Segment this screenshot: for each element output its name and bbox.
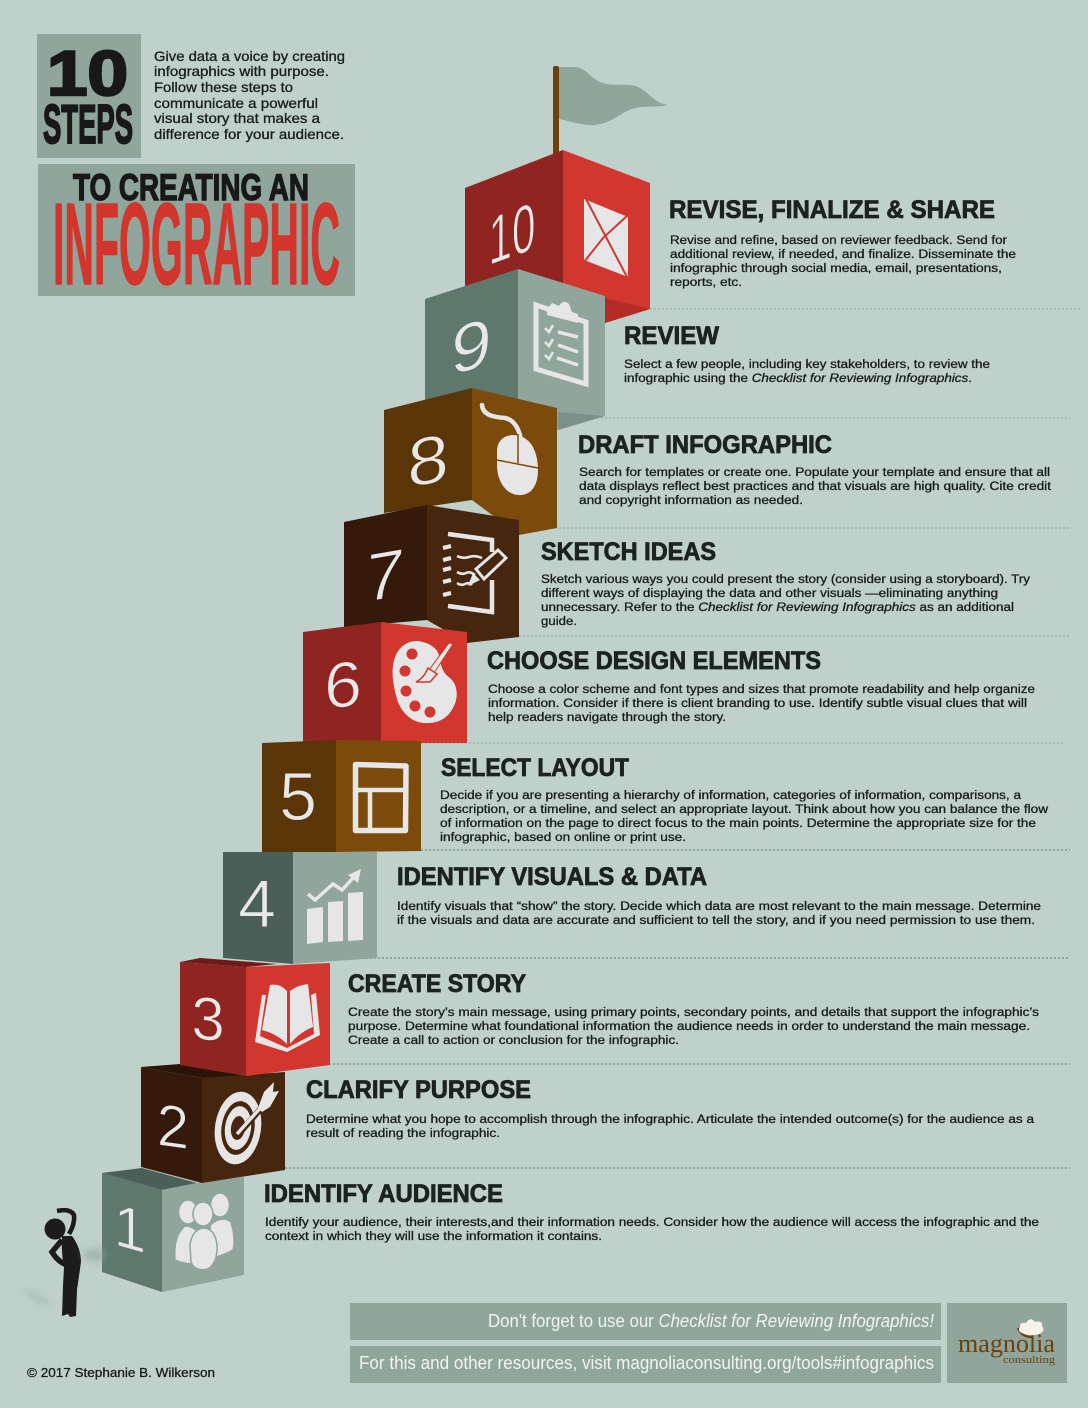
step 10 text: infographic through social media, email, presentations, bbox=[670, 261, 1002, 275]
intro text bbox=[154, 48, 345, 142]
step 5 text: Decide if you are presenting a hierarchy of information, categories of information, comparisons, a bbox=[440, 788, 1021, 802]
step 8 text: and copyright information as needed. bbox=[579, 493, 803, 507]
divider lines bbox=[285, 309, 1080, 1168]
step 3 text: purpose. Determine what foundational information the audience needs in order to understand the main message. bbox=[348, 1019, 1030, 1033]
step 8 text: Search for templates or create one. Populate your template and ensure that all bbox=[579, 465, 1050, 479]
cube 7 bbox=[344, 505, 519, 643]
cube 2 bbox=[141, 1064, 285, 1183]
step 10 text: REVISE, FINALIZE & SHARE bbox=[669, 197, 995, 224]
step 3 text: Create a call to action or conclusion for the infographic. bbox=[348, 1033, 679, 1047]
title block: to creating an infographic: TO CREATING AN bbox=[73, 167, 309, 208]
step 2 text: result of reading the infographic. bbox=[306, 1126, 500, 1140]
title block: to creating an infographic bbox=[38, 164, 355, 309]
intro text: difference for your audience. bbox=[154, 126, 344, 142]
text: INFOGRAPHIC bbox=[53, 179, 340, 309]
cube 5 bbox=[262, 740, 421, 852]
step 1 text: IDENTIFY AUDIENCE bbox=[264, 1181, 503, 1208]
step 7 text: unnecessary. Refer to the Checklist for Reviewing Infographics as an additional bbox=[541, 600, 1014, 614]
step 4 text: Identify visuals that “show” the story. Decide which data are most relevant to the main message. Determine bbox=[397, 899, 1041, 913]
step 3 text: CREATE STORY bbox=[348, 971, 526, 998]
title block: 10 steps: STEPS bbox=[43, 93, 133, 155]
step 8 text: DRAFT INFOGRAPHIC bbox=[578, 432, 832, 459]
cube 8 bbox=[384, 388, 557, 535]
step 7 text: SKETCH IDEAS bbox=[541, 539, 716, 566]
step 5 text bbox=[440, 755, 1048, 844]
step 7 text: Sketch various ways you could present the story (consider using a storyboard). Try bbox=[541, 572, 1031, 586]
step 9 text: infographic using the Checklist for Reviewing Infographics . bbox=[624, 371, 972, 385]
step 3 text: Create the story’s main message, using primary points, secondary points, and details that support the infographic’s bbox=[348, 1005, 1039, 1019]
cube 8: 8 bbox=[407, 420, 449, 503]
footer banner: checklist reminder: Don't forget to use our Checklist for Reviewing Infographics! bbox=[488, 1311, 934, 1331]
step 2 text: Determine what you hope to accomplish through the infographic. Articulate the intended outcome(s) for the audience as a bbox=[306, 1112, 1034, 1126]
flag bbox=[553, 66, 668, 156]
step 7 text: different ways of displaying the data and other visuals —eliminating anything bbox=[541, 586, 998, 600]
cube 10: 10 bbox=[489, 188, 535, 281]
step 10 text: Revise and refine, based on reviewer feedback. Send for bbox=[670, 233, 1007, 247]
footer banner: resources link bbox=[350, 1346, 941, 1383]
step 10 text bbox=[669, 197, 1016, 289]
intro text: Follow these steps to bbox=[154, 79, 293, 95]
icon: target with arrow bbox=[210, 1082, 279, 1167]
step 7 text: guide. bbox=[541, 614, 577, 628]
cube 10 bbox=[465, 150, 650, 345]
cube 7: 7 bbox=[363, 534, 406, 617]
cube 3 bbox=[180, 958, 330, 1076]
cube 9 bbox=[425, 269, 605, 430]
logo: magnolia consulting: consulting bbox=[1003, 1355, 1056, 1366]
icon: rising bar chart bbox=[307, 869, 363, 944]
logo: magnolia consulting: magnolia bbox=[958, 1329, 1055, 1358]
step 2 text: CLARIFY PURPOSE bbox=[306, 1077, 531, 1104]
icon: paint palette bbox=[393, 641, 457, 723]
step 7 text bbox=[541, 539, 1031, 628]
cube 6 bbox=[303, 622, 467, 743]
intro text: communicate a powerful bbox=[154, 95, 318, 111]
step 4 text: if the visuals and data are accurate and sufficient to tell the story, and if you need permission to use them. bbox=[397, 913, 1035, 927]
step 5 text: description, or a timeline, and select an appropriate layout. Think about how you can balance the flow bbox=[440, 802, 1048, 816]
intro text: infographics with purpose. bbox=[154, 63, 329, 79]
icon: open book bbox=[255, 984, 320, 1052]
intro text: Give data a voice by creating bbox=[154, 48, 345, 64]
icon: clipboard checklist bbox=[536, 302, 586, 384]
cube 1: 1 bbox=[114, 1191, 146, 1267]
step 1 text: context in which they will use the information it contains. bbox=[265, 1229, 602, 1243]
step 2 text bbox=[306, 1077, 1034, 1140]
logo: magnolia consulting bbox=[947, 1303, 1067, 1383]
step 5 text: SELECT LAYOUT bbox=[441, 755, 629, 782]
cube 9: 9 bbox=[449, 303, 494, 391]
title block: 10 steps: 10 bbox=[47, 39, 128, 109]
intro text: visual story that makes a bbox=[154, 110, 320, 126]
step 4 text: IDENTIFY VISUALS & DATA bbox=[397, 864, 707, 891]
step 6 text bbox=[487, 648, 1035, 724]
step 4 text bbox=[397, 864, 1041, 927]
step 1 text bbox=[264, 1181, 1039, 1243]
copyright: © 2017 Stephanie B. Wilkerson bbox=[27, 1365, 215, 1380]
step 6 text: information. Consider if there is client branding to use. Identify subtle visual clues that will bbox=[488, 696, 1027, 710]
step 5 text: infographic, based on online or print use. bbox=[440, 830, 686, 844]
step 8 text bbox=[578, 432, 1052, 507]
step 1 text: Identify your audience, their interests,and their information needs. Consider how the audience will access the infographic and the bbox=[265, 1215, 1039, 1229]
cube 4: 4 bbox=[238, 866, 276, 942]
icon: page layout bbox=[355, 764, 406, 831]
cube 3: 3 bbox=[191, 983, 225, 1055]
icon: computer mouse bbox=[482, 405, 538, 495]
cube 6: 6 bbox=[324, 648, 362, 724]
icon: notepad and pencil bbox=[443, 534, 506, 612]
step 9 text bbox=[624, 323, 990, 385]
person looking up bbox=[23, 1210, 103, 1317]
step 9 text: REVIEW bbox=[624, 323, 720, 350]
step 6 text: CHOOSE DESIGN ELEMENTS bbox=[487, 648, 821, 675]
step 9 text: Select a few people, including key stakeholders, to review the bbox=[624, 357, 990, 371]
footer banner: checklist reminder bbox=[350, 1303, 941, 1340]
cube 1 bbox=[102, 1168, 244, 1292]
step 5 text: of information on the page to direct focus to the main points. Determine the appropriate size for the bbox=[440, 816, 1036, 830]
step 6 text: Choose a color scheme and font types and sizes that promote readability and help organize bbox=[488, 682, 1035, 696]
step 10 text: additional review, if needed, and finalize. Disseminate the bbox=[670, 247, 1016, 261]
cube 5: 5 bbox=[279, 759, 317, 835]
step 6 text: help readers navigate through the story. bbox=[488, 710, 726, 724]
title block: 10 steps bbox=[37, 34, 141, 158]
step 8 text: data displays reflect best practices and that visuals are high quality. Cite credit bbox=[579, 479, 1052, 493]
cube 4 bbox=[223, 852, 377, 964]
icon: group of people bbox=[175, 1193, 234, 1270]
cube 2: 2 bbox=[157, 1090, 189, 1162]
footer banner: resources link: For this and other resources, visit magnoliaconsulting.org/tools#infographics bbox=[359, 1353, 934, 1373]
icon: envelope bbox=[584, 199, 628, 277]
step 3 text bbox=[348, 971, 1039, 1047]
step 10 text: reports, etc. bbox=[670, 275, 742, 289]
